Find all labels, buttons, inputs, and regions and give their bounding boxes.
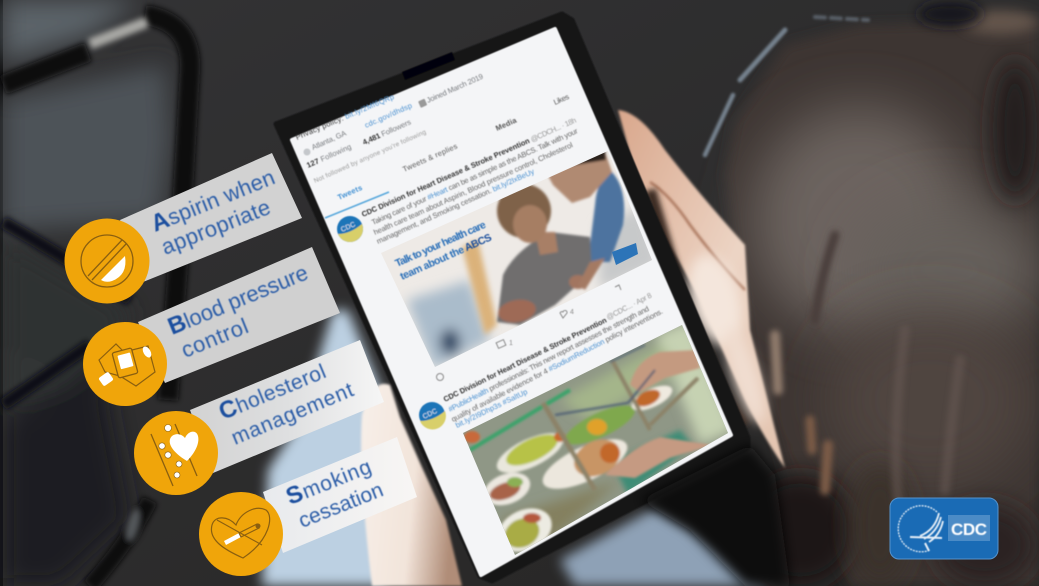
tweet 1 avatar: CDC <box>340 221 357 234</box>
tweet 1 text: health care team about Aspirin, Blood pressure control, Cholesterol <box>372 140 574 237</box>
label: Cholesterol management <box>215 357 357 450</box>
tweet 2 text: @CDC... · Apr 8 <box>605 291 653 322</box>
callout band: Smoking <box>263 437 417 553</box>
hair of the person <box>705 2 1039 586</box>
label: Blood pressure control: Blood pressure <box>164 259 312 341</box>
left hand holding tablet <box>361 384 462 586</box>
callout band: Cholesterol <box>190 340 384 473</box>
icon: heart with no smoking <box>199 492 283 576</box>
sneeze guard posts <box>543 403 595 490</box>
tweet actions <box>436 285 621 380</box>
tweet 1 text: Taking care of your #Heart can be as simple as the ABCS. Talk with your <box>370 126 580 227</box>
banner text: team about the ABCS <box>398 232 494 283</box>
woman in grey shirt <box>497 232 592 325</box>
profile header: Tweets & replies <box>401 142 459 174</box>
profile header: cdc.gov/dhdsp <box>363 101 413 130</box>
profile header: Tweets <box>336 183 364 202</box>
tweet 2 text: quality of available evidence for 4 #SodiumReduction policy interventions. <box>450 307 664 424</box>
icon: blood pressure monitor <box>83 322 167 406</box>
icon: aspirin tablet <box>64 218 150 304</box>
second person in blue shirt <box>588 172 624 262</box>
tweet 1 avatar <box>337 216 363 242</box>
label: Blood pressure control: control <box>178 313 252 363</box>
serving hands <box>630 350 700 392</box>
tweet 2 text: #PublicHealth professionals: This new report assesses the strength and <box>447 304 650 414</box>
label: Smoking cessation <box>282 453 387 533</box>
label: Cholesterol management: management <box>228 378 357 450</box>
tweet 1 text: management, and Smoking cessation. bit.ly/2IxBeUy <box>375 167 536 246</box>
profile header: Likes <box>552 92 571 107</box>
CDC logo: CDC <box>951 520 987 539</box>
tweet 2 avatar: CDC <box>422 408 439 421</box>
tablet corner shadow <box>640 445 790 586</box>
plates <box>496 432 564 474</box>
profile header <box>294 72 571 202</box>
chair behind the person <box>3 0 190 586</box>
label: Cholesterol management: Cholesterol <box>215 357 330 426</box>
profile header: Joined March 2019 <box>425 72 485 105</box>
tweet 1 text: CDC Division for Heart Disease & Stroke Prevention <box>360 136 531 219</box>
banner text: Talk to your health care <box>393 219 488 270</box>
green rail <box>470 390 570 450</box>
tweet 1 text: @CDCH... · 18h <box>529 116 578 144</box>
profile header: Privacy policy: bit.ly/2Mf6QRp <box>294 92 395 142</box>
tablet screen <box>292 29 740 575</box>
profile header: Not followed by anyone you're following <box>313 129 428 185</box>
label: Aspirin when appropriate: appropriate <box>158 194 274 260</box>
callout band: Blood pressure <box>138 247 340 383</box>
profile header: 4,481 Followers <box>361 117 413 147</box>
CDC logo <box>890 498 998 559</box>
CDC wordmark <box>948 515 990 541</box>
label: Smoking cessation: cessation <box>295 478 387 533</box>
tweet 1 photo <box>381 151 652 367</box>
callout band: Aspirin <box>120 153 302 282</box>
tweet 2 text: CDC Division for Heart Disease & Stroke Prevention <box>442 315 609 404</box>
tweet 2 avatar <box>419 402 446 429</box>
profile header: Atlanta, GA <box>310 129 348 152</box>
tweet actions: 1 <box>509 340 513 347</box>
tweet 2 text: bit.ly/2I9Dhp3s #SaltUp <box>454 387 529 430</box>
tweet actions: 4 <box>570 309 574 316</box>
profile header: Media <box>494 115 519 133</box>
HHS seal <box>898 506 943 552</box>
label: Aspirin when appropriate: Aspirin when <box>147 163 279 238</box>
tweet 2 photo: cafeteria salad bar <box>463 325 728 555</box>
icon: heart and cholesterol artery <box>134 411 218 495</box>
right hand holding tablet <box>618 110 785 468</box>
label: Smoking cessation: Smoking <box>282 453 375 511</box>
profile header: 127 Following <box>305 142 353 170</box>
jeans <box>262 310 770 586</box>
headband strap <box>705 17 868 155</box>
tablet body <box>276 14 748 581</box>
